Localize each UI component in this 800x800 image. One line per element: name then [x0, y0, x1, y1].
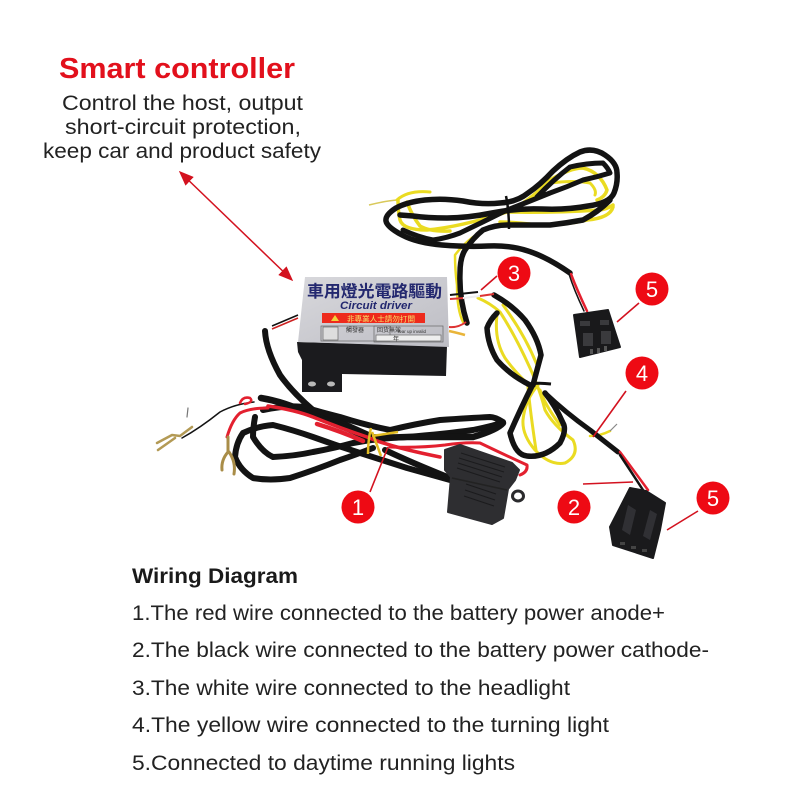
callout 3	[481, 256, 530, 290]
fuse box	[445, 445, 524, 524]
legend heading: Wiring Diagram	[132, 565, 298, 588]
callout 2: 2	[568, 495, 580, 520]
table text	[346, 326, 427, 343]
controller chinese label: 車用燈光電路驅動	[307, 282, 442, 301]
callout 4: 4	[636, 361, 648, 386]
legend item 3: 3.The white wire connected to the headlight	[132, 677, 570, 700]
wires from controller to connectors	[478, 274, 648, 490]
text block: controller description	[43, 92, 322, 163]
callout 5 upper: 5	[646, 277, 658, 302]
fuse mount tab	[512, 491, 524, 501]
text block: controller description: keep car and product safety	[43, 140, 322, 163]
callout 5 lower	[667, 482, 730, 530]
fuse ridges	[457, 453, 505, 506]
main harness wires	[182, 331, 527, 480]
controller black housing	[297, 342, 447, 392]
warning icon	[331, 315, 339, 321]
table text: Tear up invalid	[397, 329, 427, 334]
connector: lower	[610, 488, 665, 558]
arrow: description to controller	[181, 173, 291, 279]
text block: controller description: short-circuit protection,	[65, 116, 301, 139]
legend item 1: 1.The red wire connected to the battery power anode+	[132, 602, 665, 625]
circuit driver controller	[297, 277, 449, 392]
top wire bundle	[369, 150, 617, 323]
callout 1	[342, 447, 388, 524]
mounting holes	[308, 382, 335, 386]
connector: upper	[574, 310, 620, 357]
heading: smart controller: Smart controller	[59, 53, 295, 85]
callout 4	[593, 356, 658, 437]
controller top plate	[298, 277, 449, 347]
text block: controller description: Control the host, output	[62, 92, 303, 115]
callout 2	[558, 482, 633, 524]
legend item 5: 5.Connected to daytime running lights	[132, 752, 515, 775]
wiring diagram legend	[132, 565, 709, 775]
legend item 4: 4.The yellow wire connected to the turning light	[132, 714, 609, 737]
callout 3: 3	[508, 261, 520, 286]
controller leads	[272, 292, 494, 335]
controller english label: Circuit driver	[340, 300, 413, 312]
callout 5 upper	[617, 272, 668, 322]
icon: lower spade terminal	[222, 437, 234, 474]
callout 5 lower: 5	[707, 486, 719, 511]
table text: 回货無效	[377, 326, 401, 334]
table text: 觸發器	[346, 326, 364, 334]
legend item 2: 2.The black wire connected to the battery power cathode-	[132, 639, 709, 662]
table text: 年	[393, 335, 399, 343]
callout 1: 1	[352, 495, 364, 520]
warning band	[322, 313, 425, 323]
icon: left spade terminal	[157, 408, 192, 450]
spec table	[321, 326, 443, 342]
warning text: 非專業人士請勿打開	[347, 314, 415, 324]
